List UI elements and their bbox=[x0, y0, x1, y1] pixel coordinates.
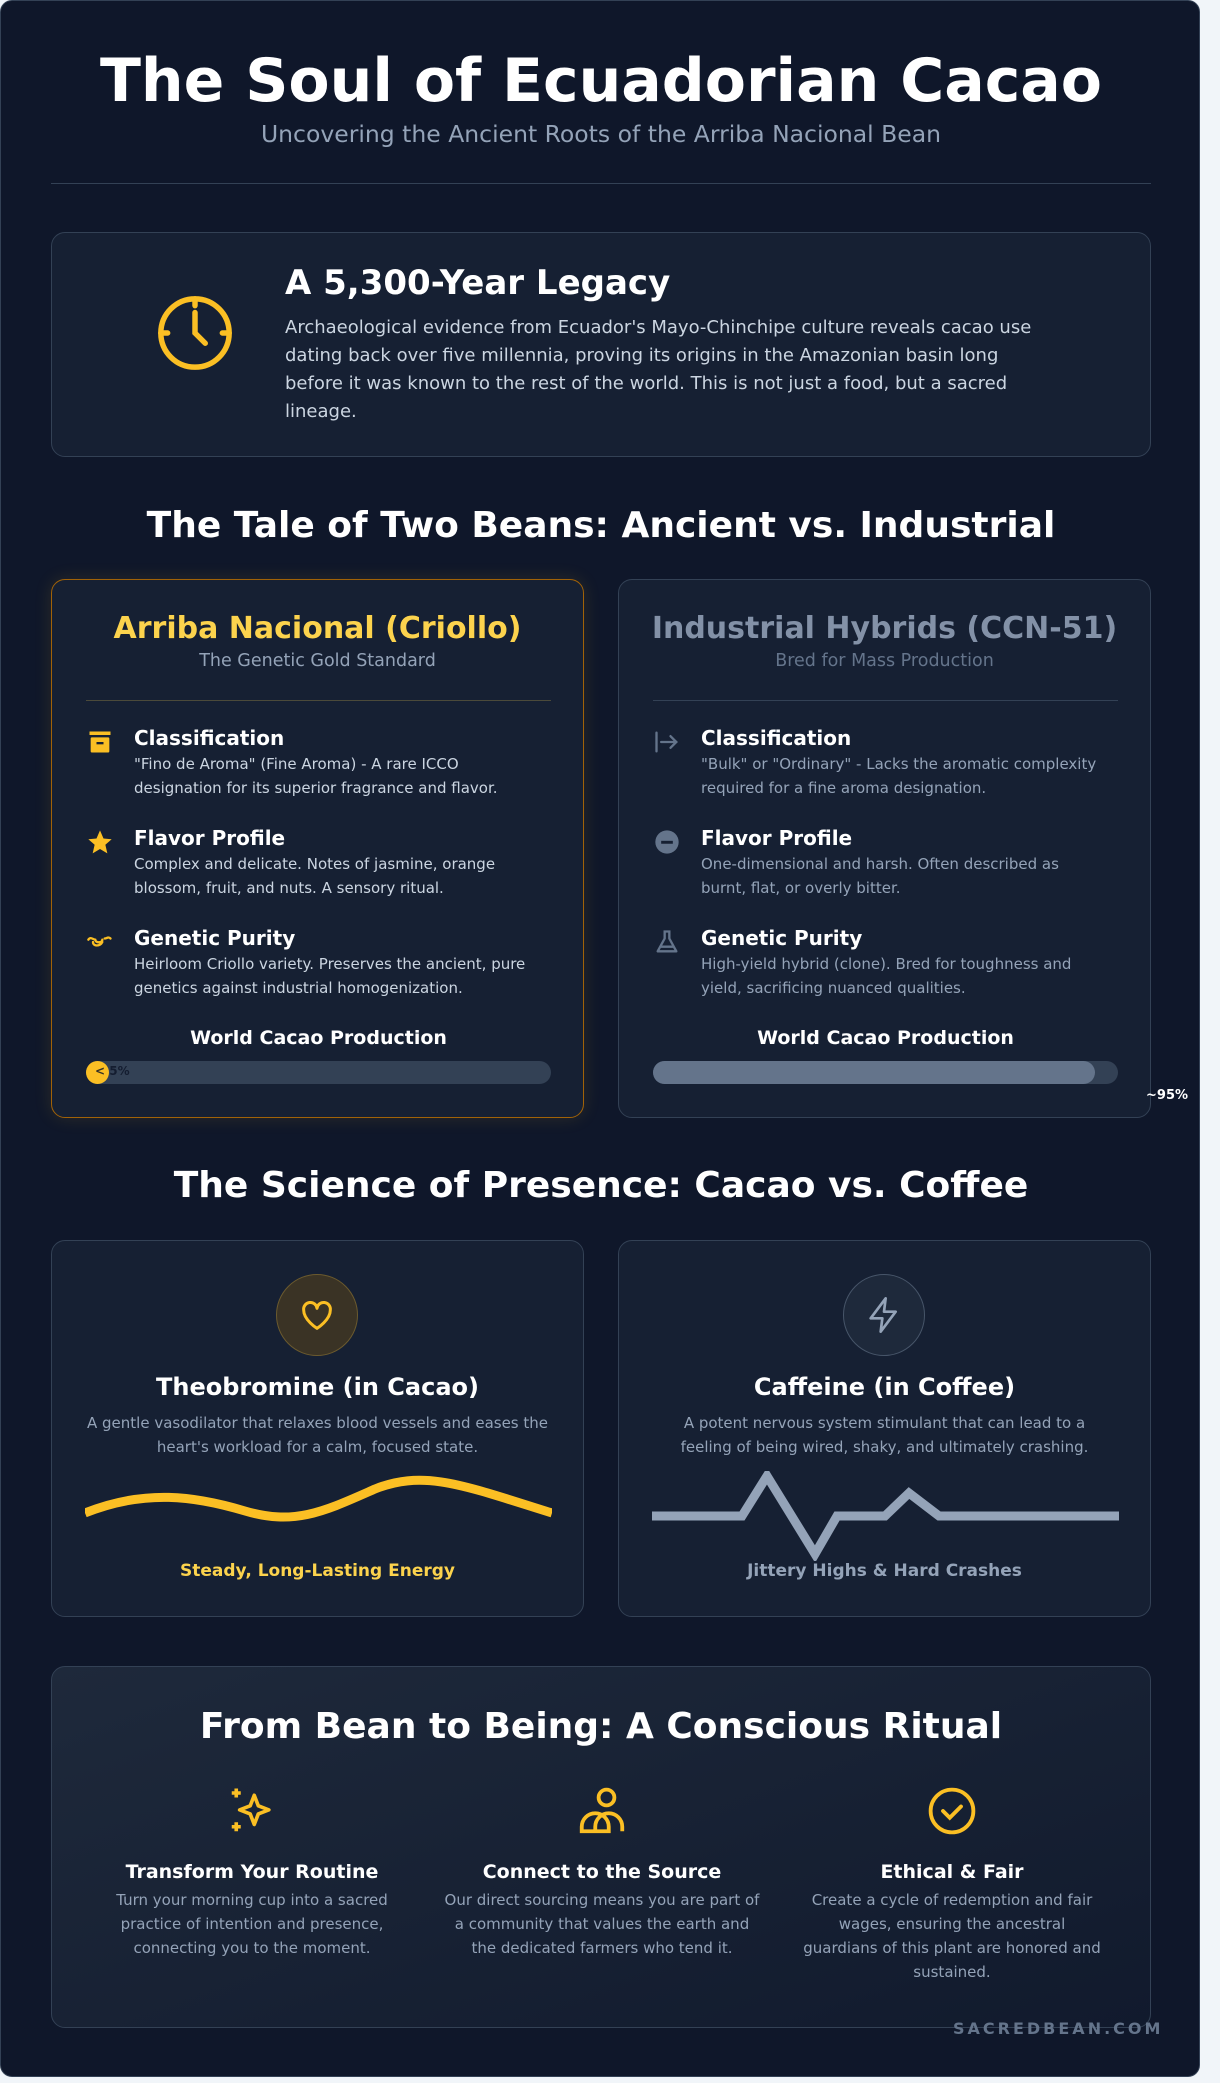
icon: minus circle bbox=[655, 830, 679, 854]
column: connect: Our direct sourcing means you are part of a community that values the earth and the dedicated farmers who tend it. bbox=[445, 1891, 759, 1957]
item: flavor: Flavor Profile bbox=[134, 826, 285, 850]
bar chart: world production bbox=[86, 1027, 551, 1084]
panel: legacy bbox=[51, 232, 1151, 457]
heading: two beans: The Tale of Two Beans: Ancient vs. Industrial bbox=[147, 505, 1055, 546]
column: transform: Transform Your Routine bbox=[126, 1861, 378, 1883]
bar chart: world production: < 5% bbox=[95, 1064, 130, 1078]
panel: industrial hybrids bbox=[618, 579, 1151, 1118]
title: The Soul of Ecuadorian Cacao bbox=[100, 46, 1102, 116]
text: A potent nervous system stimulant that can lead to a bbox=[684, 1414, 1085, 1432]
panel: arriba nacional bbox=[51, 579, 584, 1118]
card title: Industrial Hybrids (CCN-51) bbox=[652, 611, 1117, 646]
label: 95%: ~95% bbox=[1146, 1088, 1188, 1103]
panel: industrial hybrids: High-yield hybrid (clone). Bred for toughness and yield, sacrificing nuanced qualities. bbox=[701, 955, 1071, 997]
card subtitle: Bred for Mass Production bbox=[775, 651, 994, 671]
column: connect bbox=[445, 1788, 760, 1957]
icon: dna bbox=[87, 936, 112, 947]
column: ethical bbox=[803, 1788, 1101, 1981]
heading: Theobromine (in Cacao) bbox=[156, 1373, 479, 1401]
text bbox=[680, 1414, 1088, 1456]
item: classification: Classification bbox=[701, 726, 851, 750]
icon: heart bbox=[276, 1274, 358, 1356]
icon: sparkles bbox=[232, 1788, 271, 1832]
heading: From Bean to Being: A Conscious Ritual bbox=[200, 1706, 1002, 1747]
heading: Caffeine (in Coffee) bbox=[754, 1373, 1015, 1401]
icon: people bbox=[580, 1788, 624, 1834]
icon: star bbox=[88, 830, 112, 854]
footer: brand: SACREDBEAN.COM bbox=[953, 2019, 1163, 2038]
icon: arrow bbox=[655, 732, 678, 752]
column: connect: Connect to the Source bbox=[483, 1861, 721, 1883]
bar chart: world production: World Cacao Production bbox=[757, 1027, 1014, 1049]
icon: archive bbox=[90, 732, 110, 752]
panel: arriba nacional: Heirloom Criollo variety. Preserves the ancient, pure genetics against industrial homogenization. bbox=[134, 955, 525, 997]
text: feeling of being wired, shaky, and ultimately crashing. bbox=[681, 1438, 1088, 1456]
panel: industrial hybrids: One-dimensional and harsh. Often described as burnt, flat, or overly bitter. bbox=[701, 855, 1059, 897]
panel: caffeine bbox=[618, 1240, 1151, 1617]
panel: theobromine bbox=[51, 1240, 584, 1617]
chart: smooth wave bbox=[85, 1476, 552, 1522]
panel: arriba nacional: "Fino de Aroma" (Fine Aroma) - A rare ICCO designation for its superior fragrance and flavor. bbox=[134, 755, 498, 797]
column: ethical: Ethical & Fair bbox=[880, 1861, 1024, 1883]
bar chart: world production: World Cacao Production bbox=[190, 1027, 447, 1049]
column: ethical: guardians of this plant are honored and sustained. bbox=[803, 1939, 1101, 1981]
card title: Arriba Nacional (Criollo) bbox=[114, 611, 521, 646]
panel: ritual bbox=[51, 1666, 1151, 2028]
column: ethical: Create a cycle of redemption and fair wages, ensuring the ancestral bbox=[812, 1891, 1092, 1933]
text: legacy: Archaeological evidence from Ecuador's Mayo-Chinchipe culture reveals cacao use dating back over five millennia, proving its origins in the Amazonian basin long before it was known to the rest of the world. This is not just a food, but a sacred lineage. bbox=[285, 317, 1031, 422]
heading: science: The Science of Presence: Cacao vs. Coffee bbox=[174, 1165, 1028, 1206]
chart: jagged line bbox=[652, 1471, 1119, 1561]
item: purity: Genetic Purity bbox=[701, 926, 862, 950]
icon: clock bbox=[158, 296, 232, 370]
column: transform bbox=[116, 1788, 388, 1957]
column: transform: Turn your morning cup into a sacred practice of intention and presence, connecting you to the moment. bbox=[116, 1891, 388, 1957]
icon: bolt bbox=[843, 1274, 925, 1356]
icon: flask bbox=[656, 930, 678, 952]
item: flavor: Flavor Profile bbox=[701, 826, 852, 850]
panel: arriba nacional: Complex and delicate. Notes of jasmine, orange blossom, fruit, and nuts. A sensory ritual. bbox=[134, 855, 495, 897]
panel: industrial hybrids: "Bulk" or "Ordinary" - Lacks the aromatic complexity required for a fine aroma designation. bbox=[701, 755, 1096, 797]
heading: legacy: A 5,300-Year Legacy bbox=[285, 263, 670, 303]
card subtitle: The Genetic Gold Standard bbox=[199, 651, 436, 671]
bar chart: world production bbox=[653, 1027, 1118, 1084]
label: Jittery Highs & Hard Crashes bbox=[747, 1561, 1022, 1581]
item: purity: Genetic Purity bbox=[134, 926, 295, 950]
text: A gentle vasodilator that relaxes blood vessels and eases the heart's workload for a calm, focused state. bbox=[87, 1414, 548, 1456]
subtitle: Uncovering the Ancient Roots of the Arriba Nacional Bean bbox=[261, 120, 941, 148]
item: classification: Classification bbox=[134, 726, 284, 750]
label: Steady, Long-Lasting Energy bbox=[180, 1561, 455, 1581]
icon: check circle bbox=[928, 1788, 976, 1834]
